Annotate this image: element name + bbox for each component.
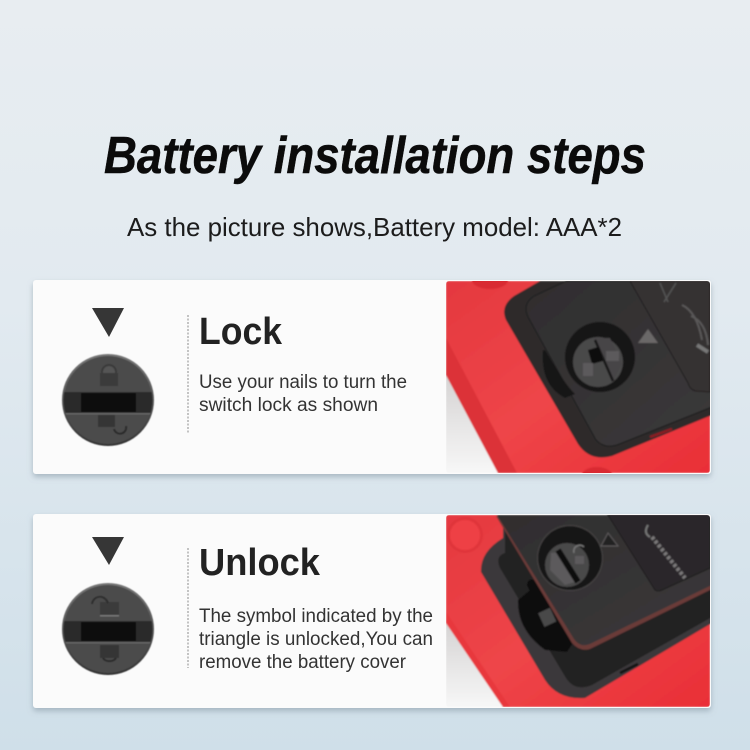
text: lock instructions: Use your nails to turn the <box>199 372 407 393</box>
heading: lock: Lock <box>199 311 283 353</box>
title: Battery installation steps <box>104 127 646 185</box>
text: unlock instructions: triangle is unlocked,You can <box>199 629 433 650</box>
photo: locked battery cover <box>446 281 710 473</box>
subtitle: As the picture shows,Battery model: AAA*2 <box>127 212 622 242</box>
icon: lock dial <box>60 354 156 446</box>
panel: lock <box>33 271 712 483</box>
card background <box>33 514 711 708</box>
divider <box>187 315 189 434</box>
text: unlock instructions: The symbol indicated by the <box>199 606 433 627</box>
icon: triangle pointer <box>92 537 124 565</box>
icon: unlock dial <box>60 583 156 675</box>
card background <box>33 280 711 474</box>
text: unlock instructions: remove the battery cover <box>199 652 407 673</box>
divider <box>187 548 189 668</box>
text: lock instructions: switch lock as shown <box>199 395 378 416</box>
panel: unlock <box>33 514 712 708</box>
icon: triangle pointer <box>92 308 124 337</box>
photo: unlocked battery cover <box>446 515 712 707</box>
heading: unlock: Unlock <box>199 542 321 584</box>
